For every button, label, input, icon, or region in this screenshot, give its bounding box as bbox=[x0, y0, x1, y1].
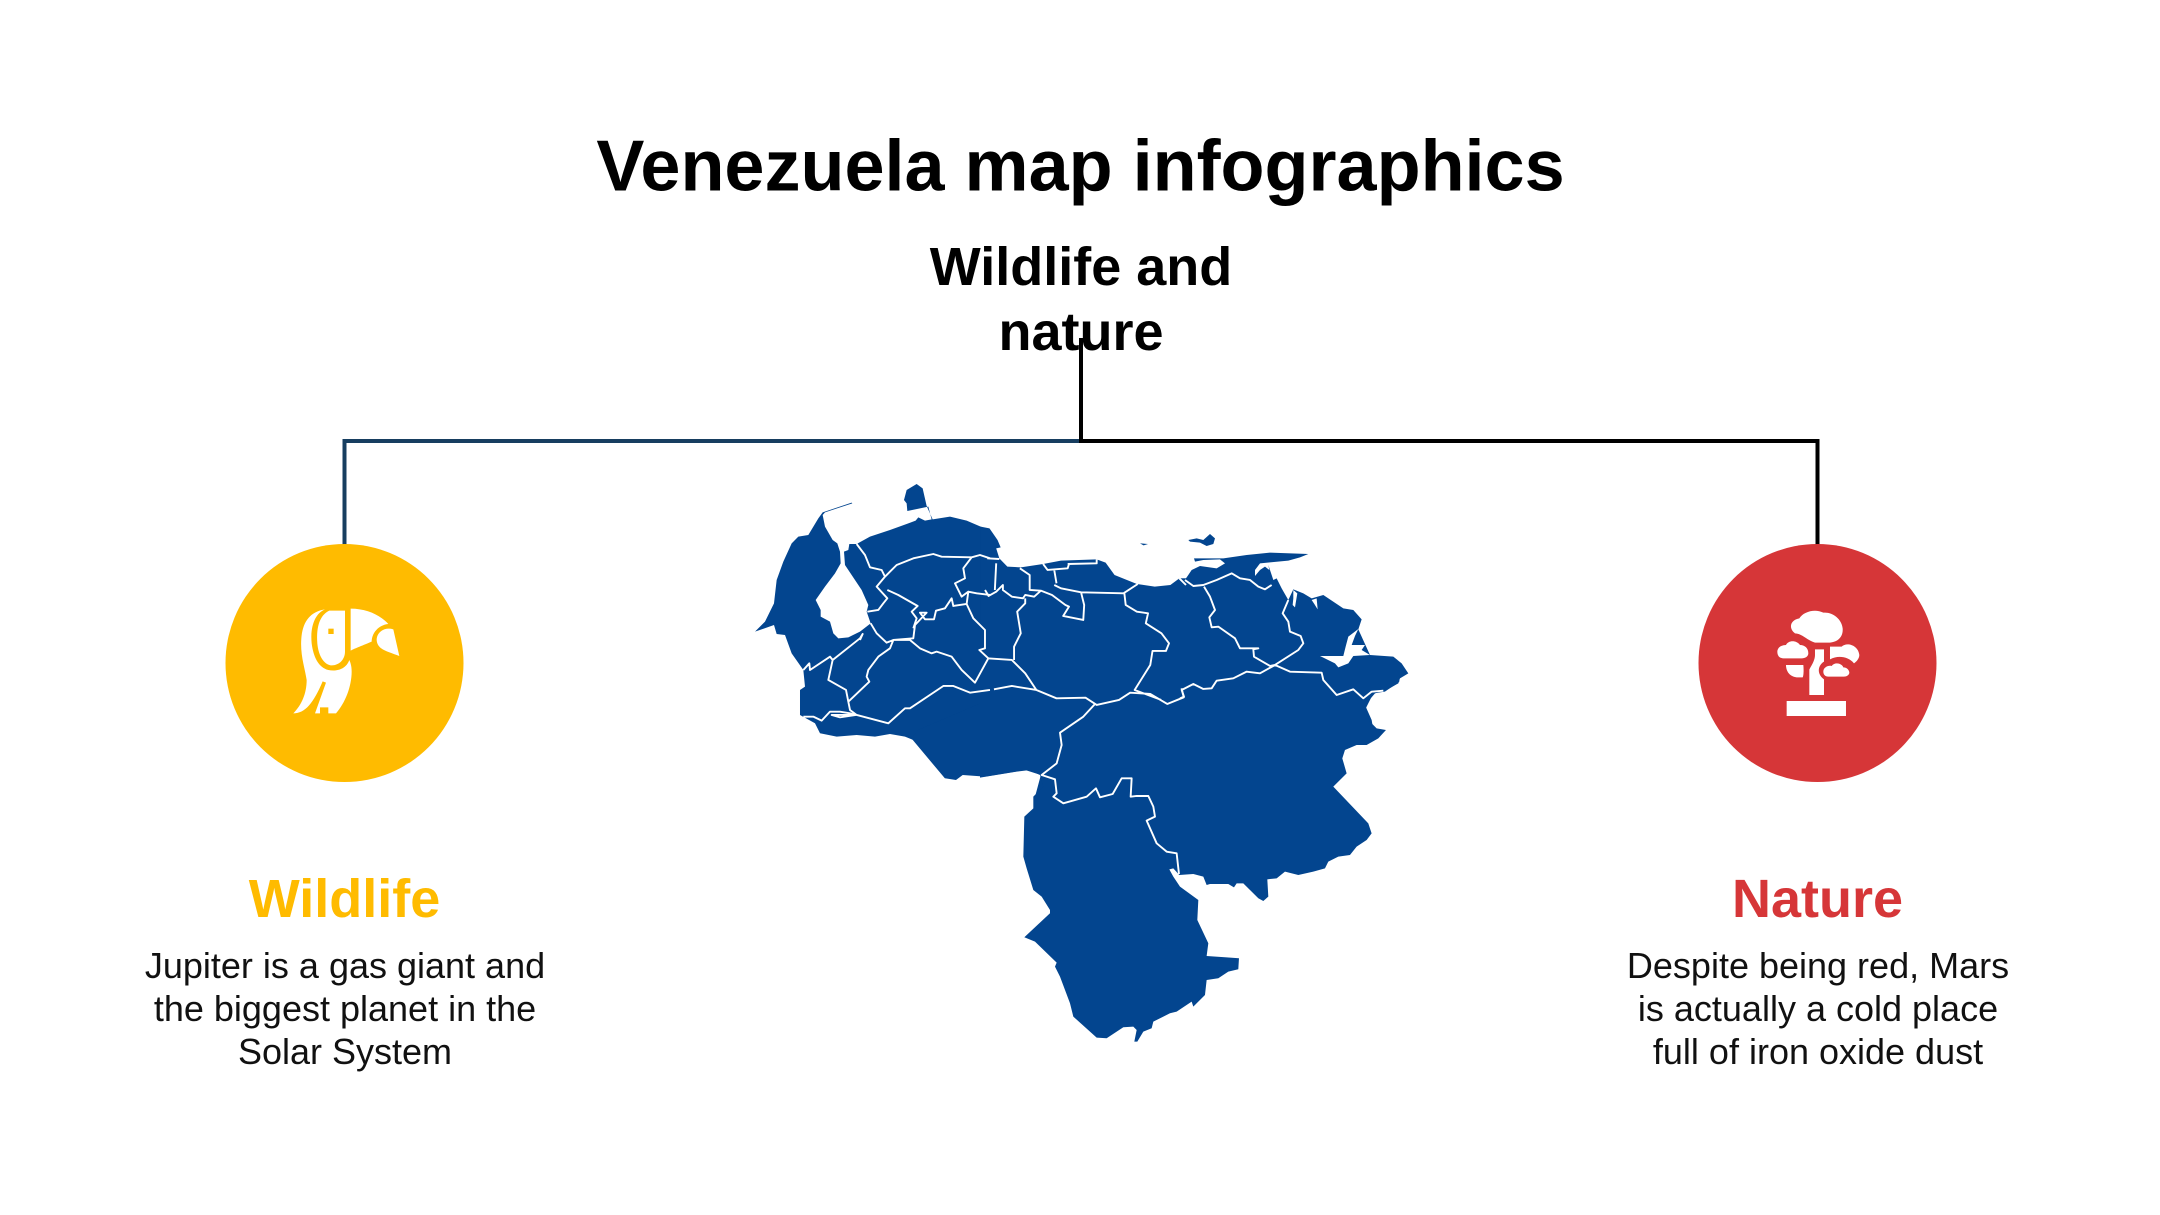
eastern states bbox=[1180, 534, 1408, 730]
southern states bbox=[980, 680, 1399, 1042]
connector lines bbox=[344, 338, 1818, 548]
central states bbox=[911, 527, 1190, 800]
western states bbox=[755, 484, 990, 740]
nature heading: Nature bbox=[1732, 869, 1903, 929]
nature description: full of iron oxide dust bbox=[1653, 1031, 1983, 1072]
state borders bbox=[803, 544, 1383, 874]
icon: toucan bbox=[293, 609, 399, 713]
wildlife description: the biggest planet in the bbox=[154, 988, 536, 1029]
icon: tree bbox=[1777, 611, 1859, 716]
title: Venezuela map infographics bbox=[596, 126, 1565, 206]
nature description: Despite being red, Mars bbox=[1627, 945, 2009, 986]
wildlife heading: Wildlife bbox=[249, 869, 440, 929]
nature circle bbox=[1698, 544, 1936, 782]
subtitle: wildlife and nature: Wildlife and bbox=[930, 237, 1232, 297]
wildlife description: Jupiter is a gas giant and bbox=[145, 945, 545, 986]
wildlife circle bbox=[226, 544, 464, 782]
nature description: is actually a cold place bbox=[1638, 988, 1998, 1029]
wildlife description: Solar System bbox=[238, 1031, 452, 1072]
map of Venezuela bbox=[755, 484, 1408, 1042]
subtitle: wildlife and nature: nature bbox=[998, 302, 1164, 362]
